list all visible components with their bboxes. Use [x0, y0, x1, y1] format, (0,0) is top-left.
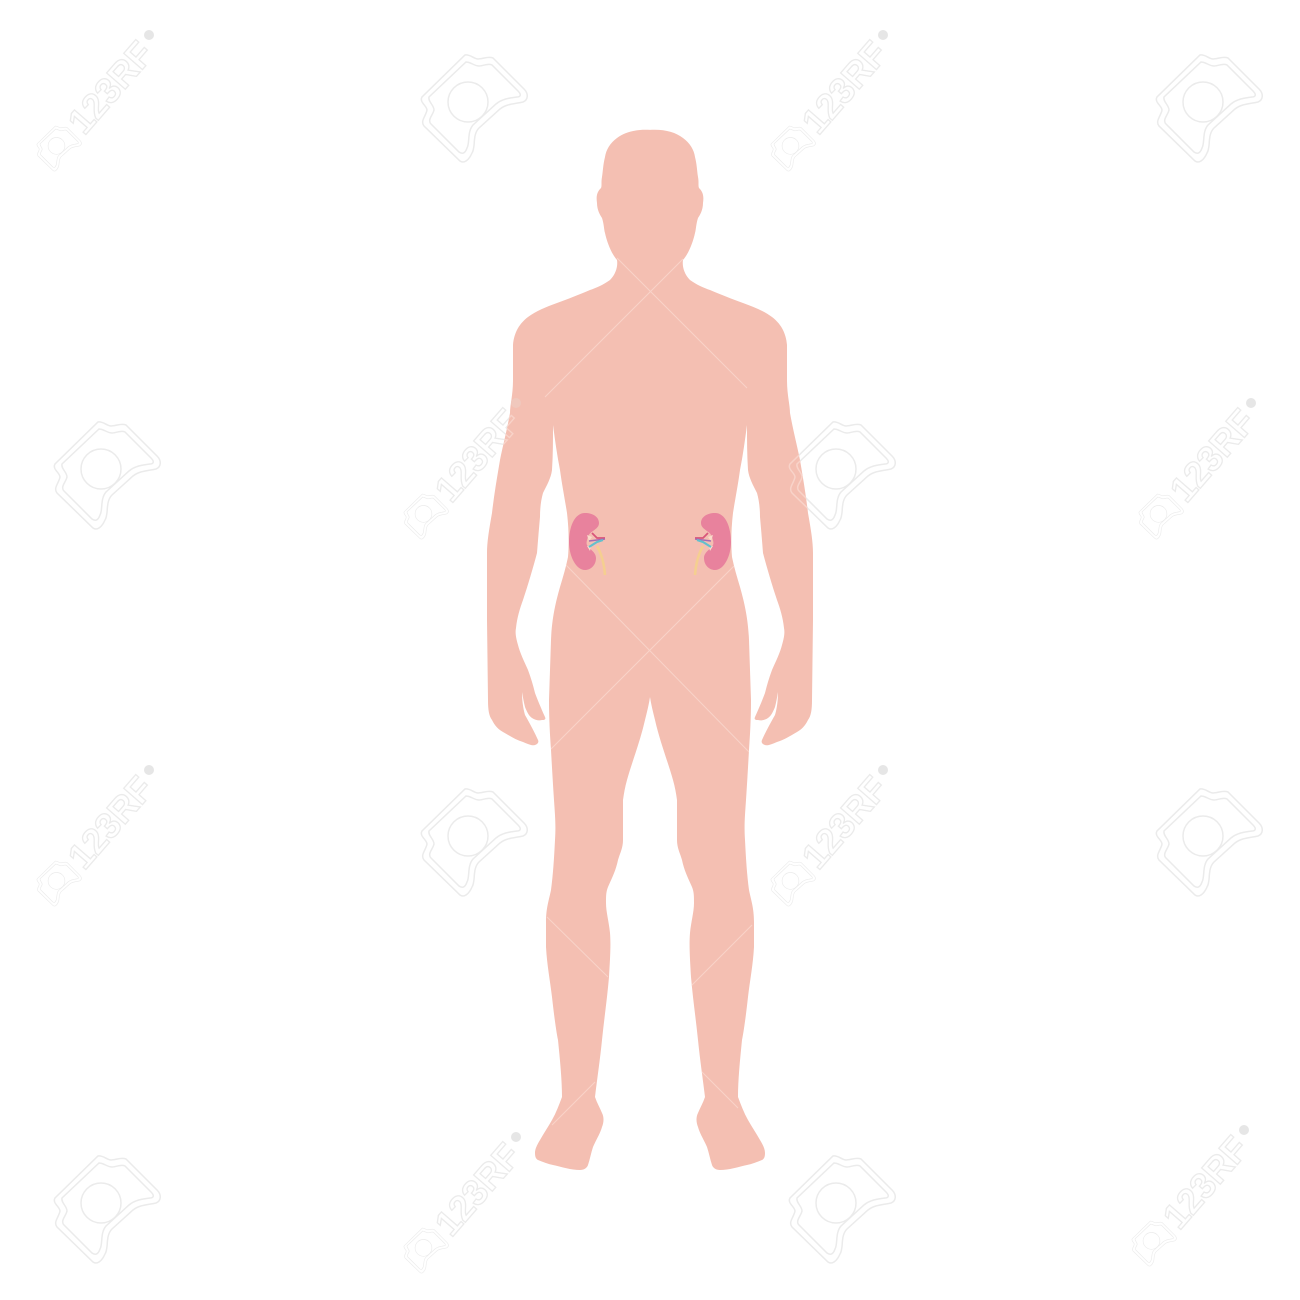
watermark logo 1: [421, 55, 527, 162]
watermark logo 3: [54, 422, 160, 529]
watermark stamp 5: [37, 765, 161, 906]
watermark stamp 6: [771, 765, 895, 906]
watermark logo 5: [421, 789, 527, 896]
watermark logo 8: [789, 1156, 895, 1263]
watermark stamp 8: [1132, 1125, 1256, 1266]
watermark stamp 2: 123RF: [793, 33, 895, 142]
watermark overlay on body: 123RF: [426, 401, 528, 510]
right kidney: [695, 513, 731, 575]
watermark stamp 4: 123RF: [1161, 401, 1263, 510]
watermark stamp 7: [404, 1132, 528, 1273]
watermark logo 2: [1156, 55, 1262, 162]
watermark stamp 2: [771, 30, 895, 171]
watermark stamp 1: 123RF: [59, 33, 161, 142]
watermark stamp 4: [1139, 398, 1263, 539]
watermark stamp 1: [37, 30, 161, 171]
left kidney: [569, 513, 605, 575]
watermark stamp 3: 123RF: [426, 401, 528, 510]
watermark stamp 5: 123RF: [59, 768, 161, 877]
watermark stamp 3: [404, 398, 528, 539]
watermark logo 6: [1156, 789, 1262, 896]
watermark overlay on body: [504, 258, 808, 1126]
watermark stamp 6: 123RF: [793, 768, 895, 877]
watermark stamp 8: 123RF: [1154, 1128, 1256, 1237]
watermark stamp 7: 123RF: [426, 1135, 528, 1244]
watermark logo 4: [789, 422, 895, 529]
watermark logo 7: [54, 1156, 160, 1263]
human body silhouette: [487, 130, 813, 1170]
